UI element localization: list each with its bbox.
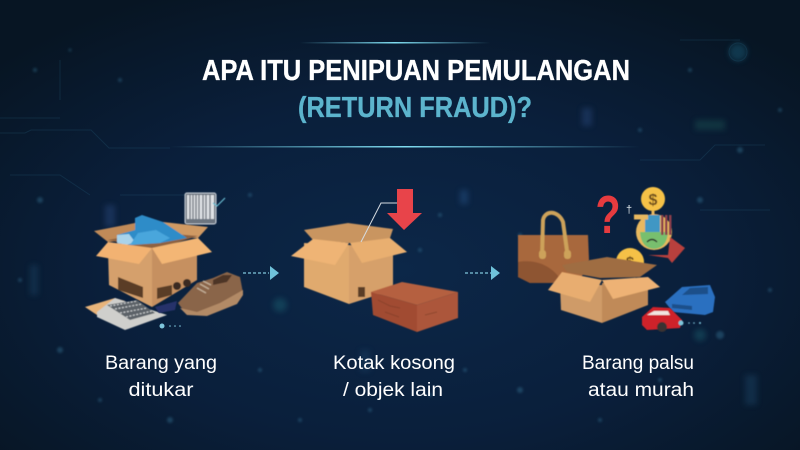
title: (RETURN FRAUD)? — [298, 92, 532, 124]
icon: red down arrow — [387, 189, 422, 230]
icon: sad coin cluster: $ — [626, 254, 635, 271]
icon: cross mark: † — [626, 204, 632, 216]
title: APA ITU PENIPUAN PEMULANGAN — [202, 55, 630, 87]
dotted pointer — [160, 324, 181, 328]
icon: sad coin cluster — [616, 187, 685, 276]
icon: empty open box — [291, 223, 407, 304]
label: item 1: ditukar — [128, 380, 194, 401]
label: item 2 — [333, 353, 455, 401]
icon: blue car — [665, 285, 715, 315]
label: item 3 — [582, 353, 694, 401]
dark plinth — [155, 301, 177, 313]
icon: question mark: ? — [596, 185, 620, 245]
icon: barcode card — [185, 193, 225, 224]
icon: open box with clothes — [94, 215, 212, 307]
pointer line — [361, 203, 398, 242]
top glow line — [300, 42, 490, 44]
label: item 1 — [105, 353, 217, 401]
icon: open box with goods — [548, 257, 660, 323]
bottom glow line — [170, 146, 640, 148]
label: item 2: / objek lain — [343, 380, 443, 401]
icon: handbag — [518, 213, 589, 283]
arrow 1 — [243, 266, 279, 280]
label: item 3: Barang palsu — [582, 353, 694, 374]
title — [202, 55, 630, 124]
icon: shoe — [178, 272, 243, 316]
icon: brick — [371, 282, 458, 332]
icon: calculator — [85, 298, 167, 330]
clothes — [117, 215, 187, 245]
label: item 3: atau murah — [588, 380, 694, 401]
label: item 1: Barang yang — [105, 353, 217, 374]
icon: sad coin cluster: $ — [649, 192, 658, 209]
label: item 2: Kotak kosong — [333, 353, 455, 374]
icon: red car — [642, 307, 701, 332]
arrow 2 — [465, 266, 500, 280]
